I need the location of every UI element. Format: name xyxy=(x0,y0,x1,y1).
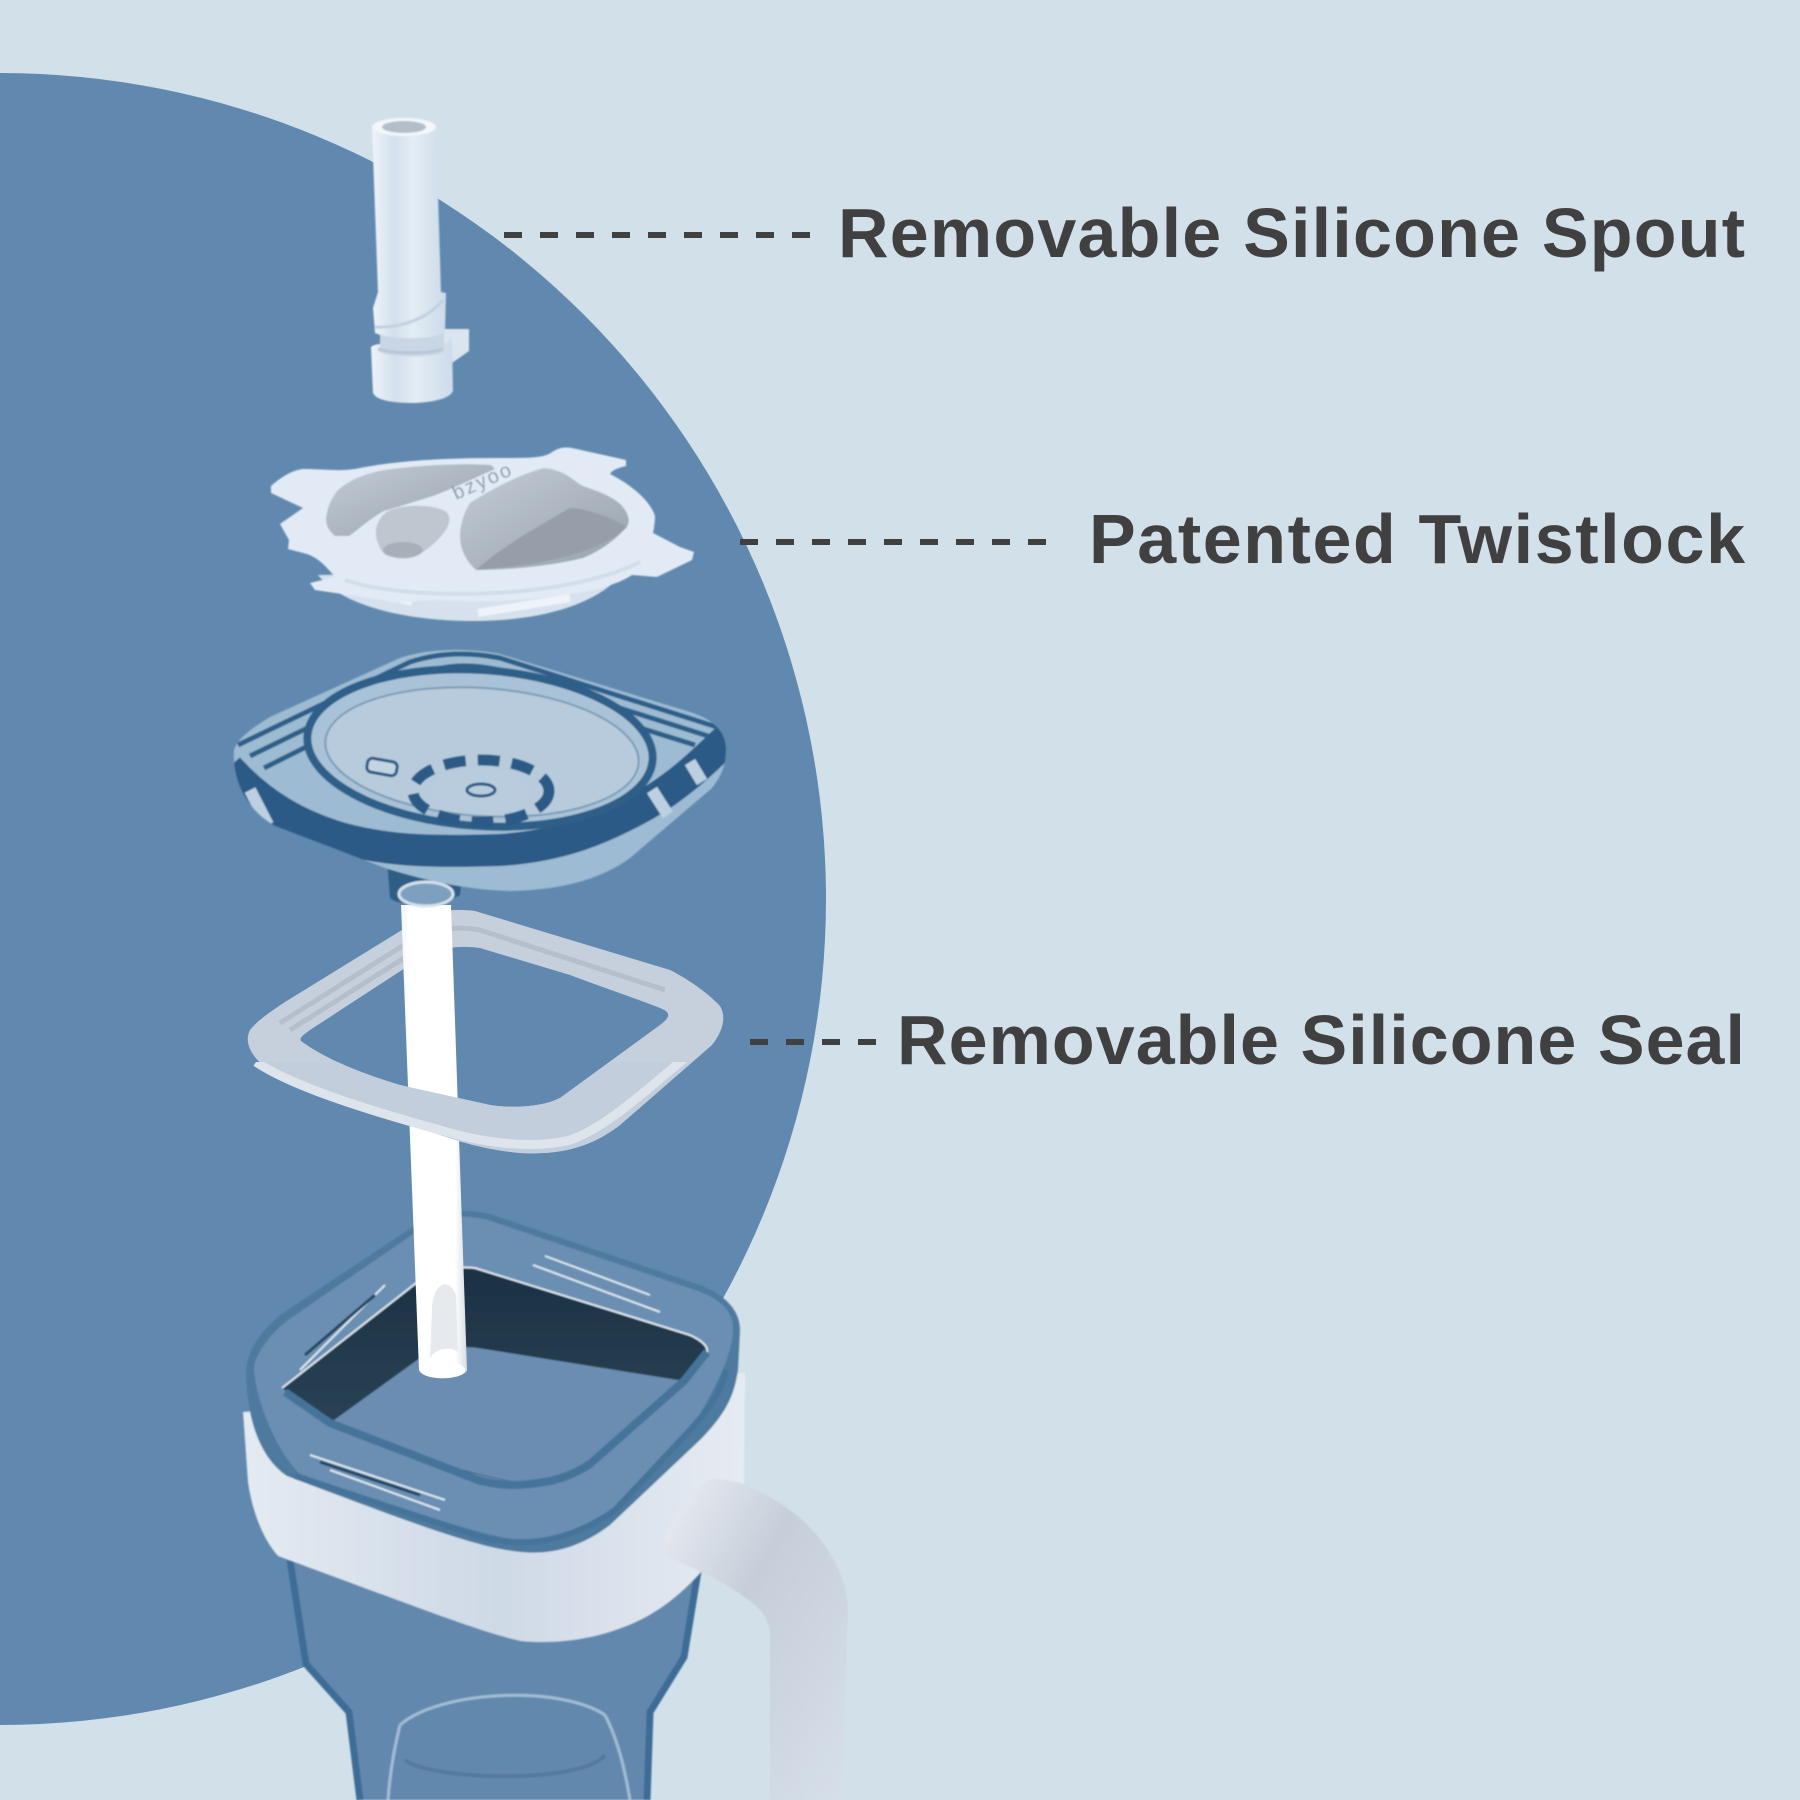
small recess xyxy=(376,506,449,558)
part: twistlock xyxy=(271,447,694,621)
leader line: seal xyxy=(750,1039,876,1045)
lid notch xyxy=(366,758,398,776)
part: drinking straw xyxy=(401,905,467,1378)
tumbler collar band xyxy=(243,1373,745,1642)
tumbler handle xyxy=(664,1478,848,1800)
tumbler inner floor xyxy=(330,1347,684,1484)
tumbler rim top face xyxy=(254,1217,733,1541)
label: spout: Removable Silicone Spout xyxy=(838,194,1745,272)
twistlock front lip xyxy=(345,562,640,594)
lid stem xyxy=(387,860,462,904)
twistlock underside xyxy=(318,570,625,621)
tumbler rim edge xyxy=(295,1370,726,1542)
background circle xyxy=(0,73,826,1725)
leader line: twistlock xyxy=(740,539,1046,545)
tumbler inner wall xyxy=(282,1267,707,1484)
part: silicone seal (front) xyxy=(254,1062,692,1154)
large recess xyxy=(460,468,629,570)
part: transparent lid xyxy=(220,640,740,906)
tumbler rim xyxy=(246,1211,740,1553)
tumbler body xyxy=(289,1550,701,1800)
brand mark: bzyoo xyxy=(449,459,515,505)
label: twistlock: Patented Twistlock xyxy=(1089,500,1745,578)
twistlock plate xyxy=(271,447,694,603)
left recess xyxy=(326,464,495,536)
tumbler rim glints xyxy=(300,1256,660,1510)
lid lower dark band xyxy=(228,738,728,851)
label: seal: Removable Silicone Seal xyxy=(897,1001,1745,1079)
twistlock slots xyxy=(390,596,570,613)
part: silicone seal (back) xyxy=(248,910,723,1153)
leader line: spout xyxy=(504,232,810,238)
lid valve cog xyxy=(413,760,549,822)
lid inner floor xyxy=(321,677,643,827)
lid body xyxy=(233,649,726,892)
tumbler base ring xyxy=(388,1695,630,1800)
lid inner ring xyxy=(302,658,658,838)
part: silicone spout xyxy=(371,118,469,403)
part: tumbler xyxy=(243,1211,848,1800)
lid rim stripes xyxy=(238,654,720,768)
tumbler opening lip xyxy=(285,1352,707,1485)
